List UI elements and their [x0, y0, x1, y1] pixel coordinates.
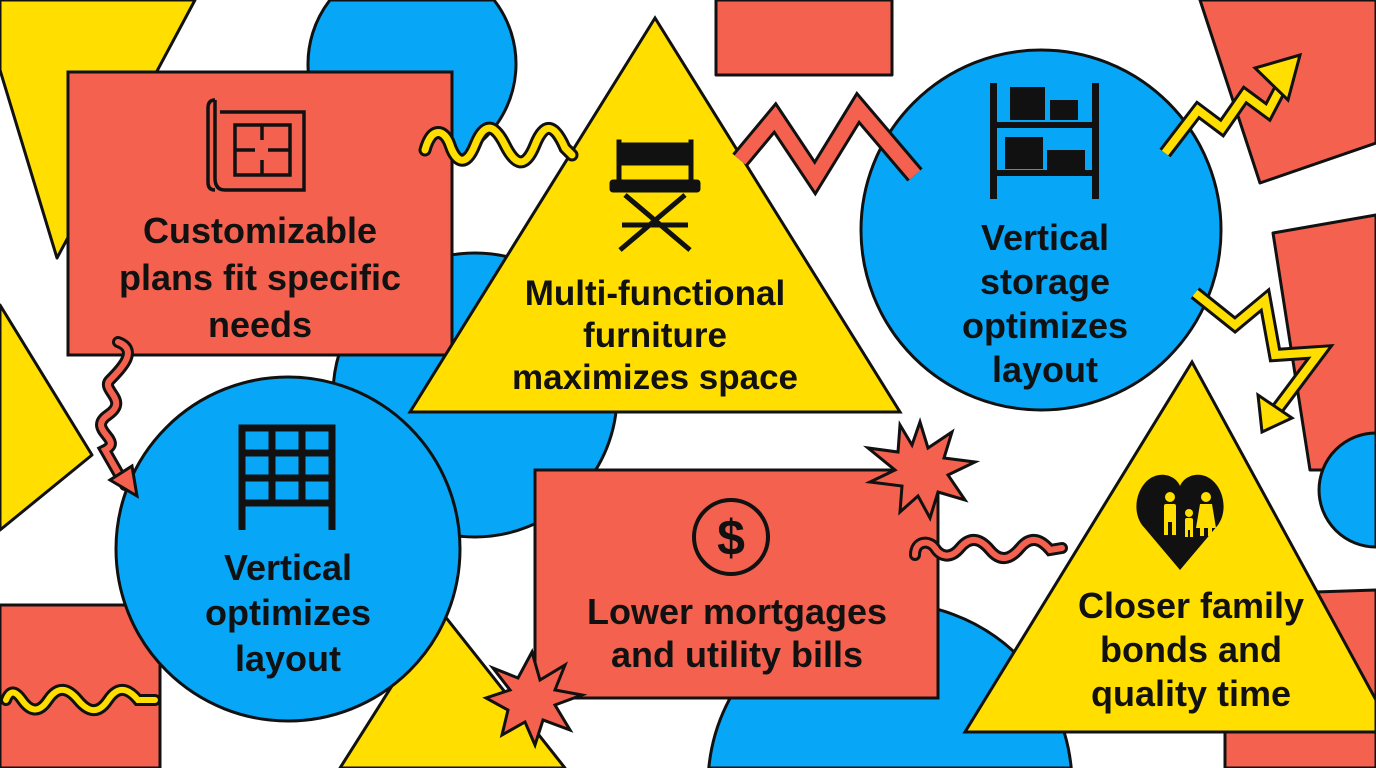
text: vertical optimizes: Vertical — [224, 547, 352, 588]
icon: shelf — [990, 83, 1099, 199]
icon: dollar — [694, 500, 768, 574]
panel: customizable plans: needs — [208, 304, 312, 345]
icon: director chair — [610, 140, 700, 250]
panel: multi-functional furniture — [410, 18, 900, 412]
panel: multi-functional furniture: furniture — [583, 316, 727, 355]
text: customizable: Customizable — [143, 210, 377, 251]
icon: grid shelf — [242, 428, 332, 530]
icon: dollar: $ — [717, 510, 745, 566]
text: closer family: Closer family — [1078, 585, 1304, 626]
zigzag connector: red — [740, 108, 915, 178]
wavy connector: red right — [915, 540, 1062, 558]
panel: vertical optimizes: layout — [235, 638, 341, 679]
panel: lower mortgages — [535, 470, 938, 698]
wavy decoration: yellow bottom left — [6, 690, 155, 710]
wavy arrow: red left — [101, 342, 137, 496]
panel: closer family bonds: quality time — [1091, 673, 1291, 714]
panel: vertical storage: layout — [992, 349, 1098, 390]
panel: vertical storage: storage — [980, 261, 1110, 302]
text: multi-functional: Multi-functional — [525, 274, 785, 313]
starburst: red bottom — [486, 652, 582, 745]
icon: blueprint — [208, 100, 304, 190]
panel: customizable plans: plans fit specific — [119, 257, 401, 298]
zigzag arrow: yellow right — [1195, 293, 1320, 432]
text: lower mortgages: Lower mortgages — [587, 591, 887, 632]
wavy connector: yellow top — [425, 128, 572, 162]
zigzag arrow: yellow top right — [1165, 55, 1300, 153]
icon: heart family — [1136, 475, 1224, 570]
text: vertical storage: Vertical — [981, 217, 1109, 258]
panel: vertical storage: optimizes — [962, 305, 1128, 346]
panel: customizable plans — [68, 72, 452, 355]
panel: vertical optimizes — [116, 377, 460, 721]
starburst: red top — [868, 422, 975, 518]
panel: lower mortgages: and utility bills — [611, 634, 863, 675]
panel: vertical storage — [861, 50, 1221, 410]
panel: closer family bonds — [965, 362, 1376, 732]
panel: closer family bonds: bonds and — [1100, 629, 1282, 670]
panel: multi-functional furniture: maximizes space — [512, 358, 798, 397]
panel: vertical optimizes: optimizes — [205, 592, 371, 633]
